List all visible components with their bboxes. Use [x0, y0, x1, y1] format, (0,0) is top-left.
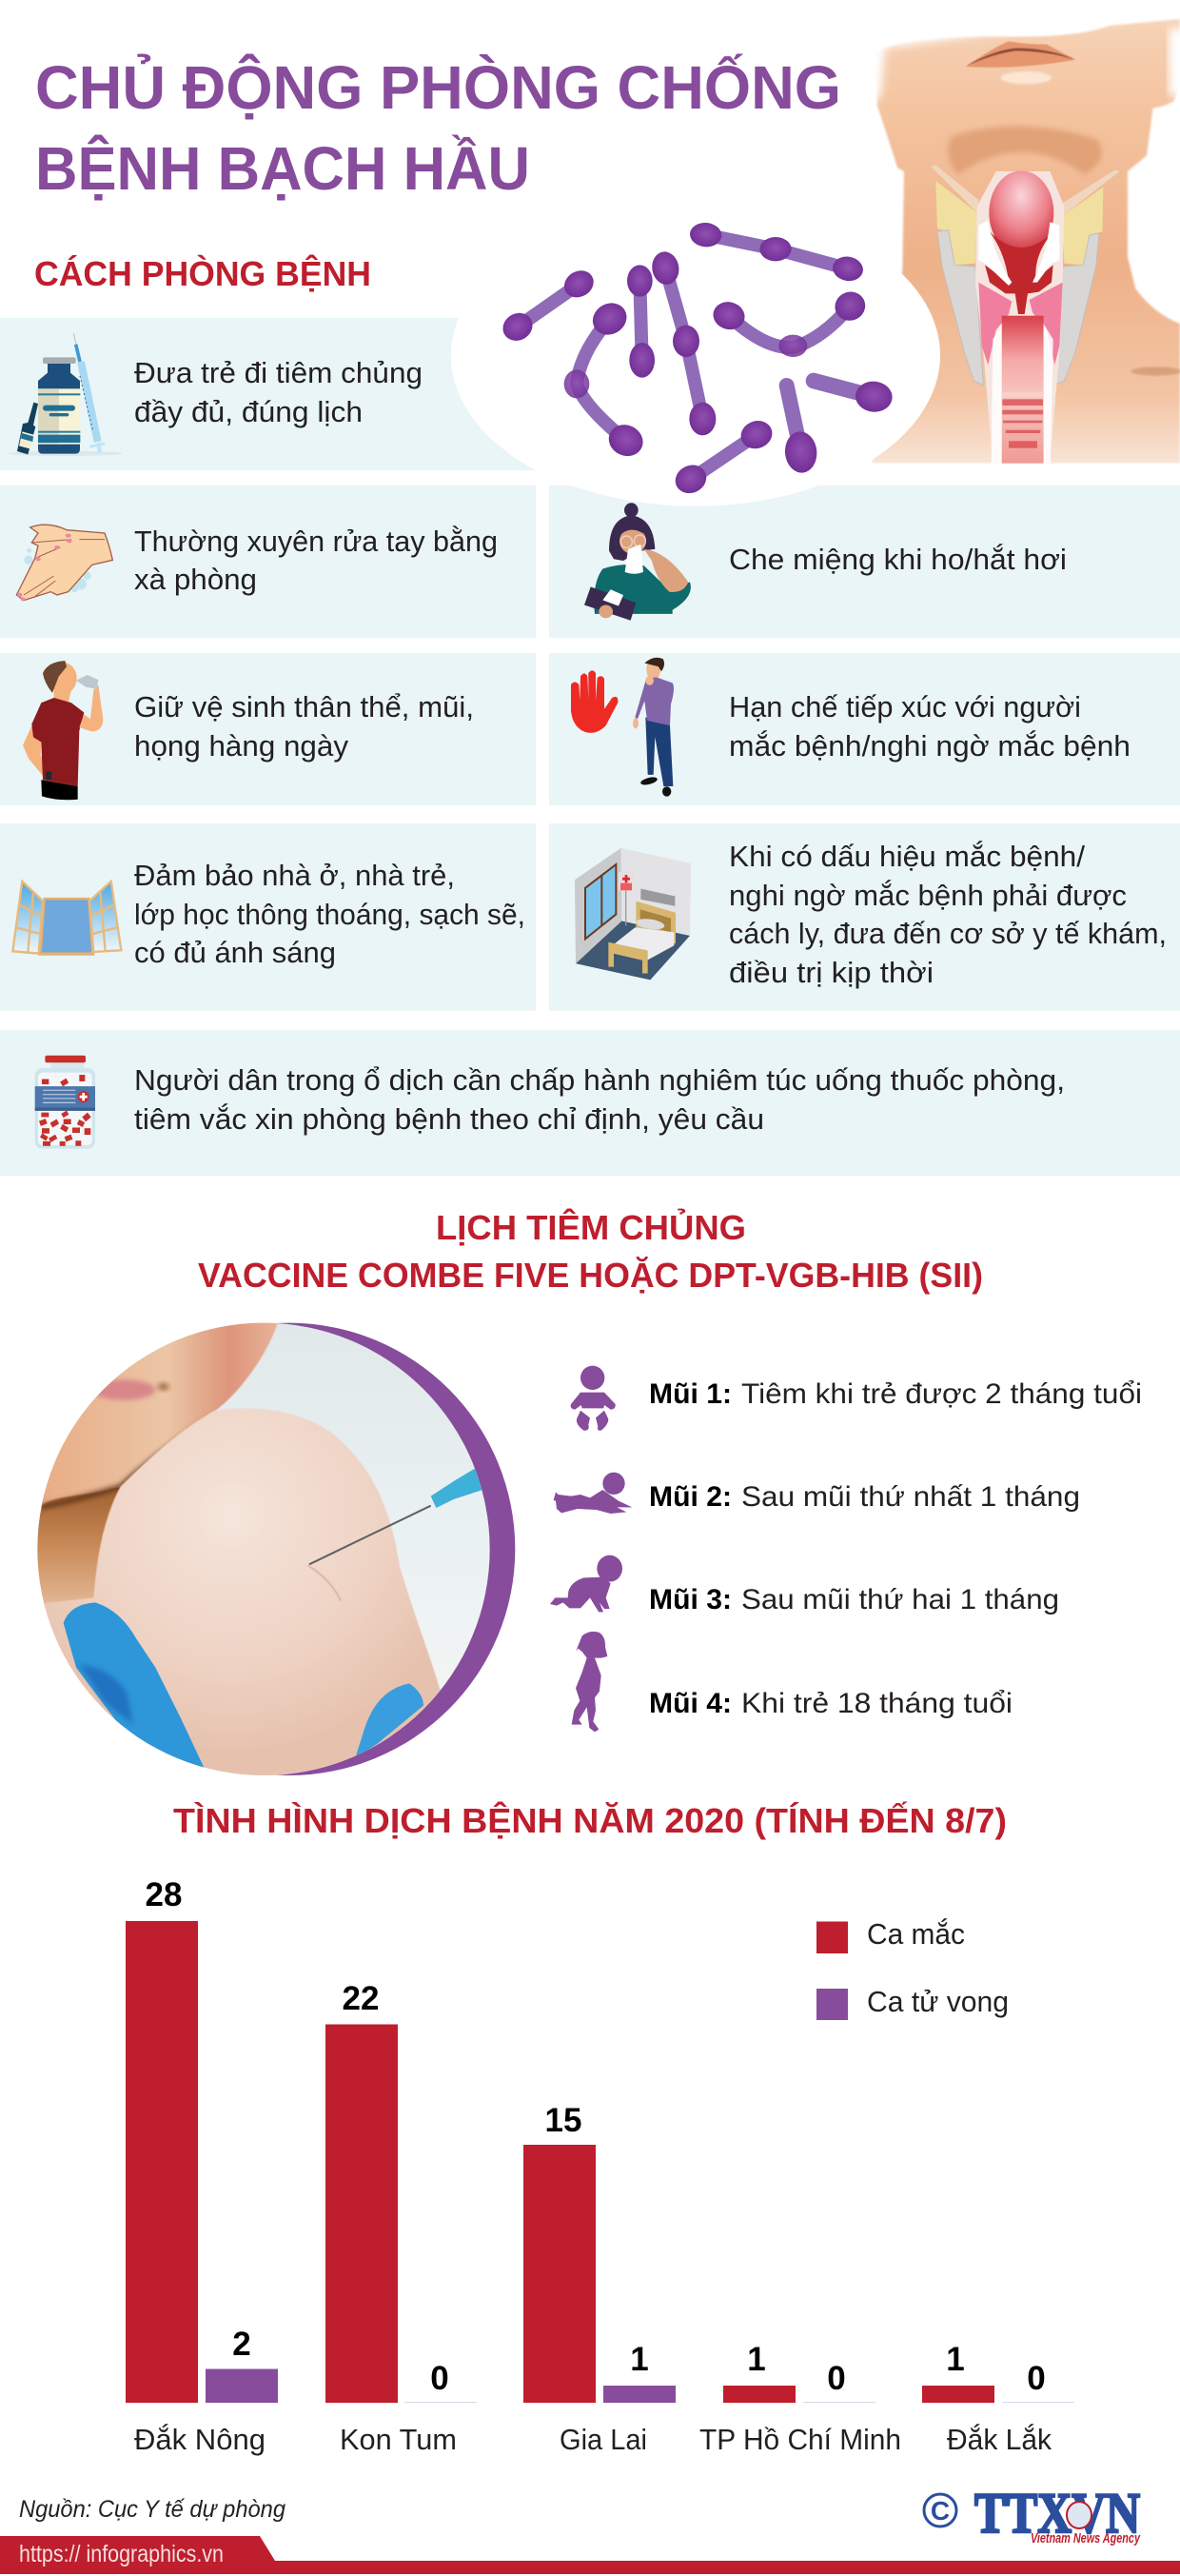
icon: toddler walking	[572, 1632, 607, 1732]
text: có đủ ánh sáng	[134, 936, 336, 969]
title: CHỦ ĐỘNG PHÒNG CHỐNG	[35, 52, 841, 122]
panel: hand washing	[0, 485, 536, 638]
group: Kon Tum: 22	[343, 1980, 379, 2017]
text: Giữ vệ sinh thân thể, mũi,	[134, 690, 474, 723]
icon: baby lying	[554, 1473, 632, 1514]
text: dose 2: Sau mũi thứ nhất 1 tháng	[741, 1481, 1080, 1513]
panel: personal hygiene	[0, 653, 536, 805]
text	[134, 1063, 1065, 1136]
logo: TTXVN: TTXVN	[974, 2482, 1140, 2545]
icon: open window	[12, 882, 121, 956]
group: TP Hồ Chí Minh	[699, 2341, 901, 2456]
group: Đắk Nông: 2	[232, 2326, 251, 2363]
text: tiêm vắc xin phòng bệnh theo chỉ định, yêu cầu	[134, 1102, 764, 1136]
heading: vaccine schedule	[198, 1207, 983, 1295]
text: mắc bệnh/nghi ngờ mắc bệnh	[729, 729, 1131, 763]
icon: hospital room	[575, 848, 691, 980]
text: dose 4: Mũi 4:	[649, 1688, 732, 1719]
panel: limit contact	[549, 653, 1180, 805]
icon: vaccine vial and syringe	[8, 333, 122, 456]
group: Kon Tum: Kon Tum	[340, 2423, 457, 2456]
text: Đảm bảo nhà ở, nhà trẻ,	[134, 859, 455, 892]
heading: vaccine schedule: LỊCH TIÊM CHỦNG	[436, 1207, 746, 1247]
legend	[816, 1917, 1009, 2020]
text: dose 1: Tiêm khi trẻ được 2 tháng tuổi	[741, 1378, 1142, 1410]
footer band with url	[0, 2536, 1180, 2574]
text: dose 2: Mũi 2:	[649, 1481, 732, 1513]
text: dose 4: Khi trẻ 18 tháng tuổi	[741, 1688, 1013, 1719]
text	[134, 690, 474, 763]
photo: child receiving injection	[29, 1318, 515, 1778]
icon: baby crawling	[550, 1556, 622, 1612]
heading: prevention: CÁCH PHÒNG BỆNH	[34, 253, 371, 293]
panel: vaccination	[0, 318, 536, 470]
text	[729, 840, 1167, 989]
text: Đưa trẻ đi tiêm chủng	[134, 356, 423, 389]
panel: isolation and treatment	[549, 823, 1180, 1011]
text: nghi ngờ mắc bệnh phải được	[729, 879, 1127, 912]
legend: Ca tử vong	[867, 1985, 1009, 2018]
group: Kon Tum	[325, 1980, 477, 2456]
text: Thường xuyên rửa tay bằng	[134, 525, 498, 558]
group: Gia Lai: Gia Lai	[560, 2423, 647, 2456]
icon: pill jar	[35, 1056, 95, 1149]
white oval behind bacteria	[872, 272, 940, 459]
group: Đắk Nông: 28	[146, 1876, 182, 1913]
text: lớp học thông thoáng, sạch sẽ,	[134, 898, 525, 931]
text: dose 3: Sau mũi thứ hai 1 tháng	[741, 1584, 1059, 1615]
group: Gia Lai	[523, 2102, 676, 2456]
text: xà phòng	[134, 563, 257, 596]
group: Đắk Nông: Đắk Nông	[134, 2423, 266, 2456]
group: Đắk Lắk: 1	[946, 2341, 965, 2378]
heading: 2020 situation: TÌNH HÌNH DỊCH BỆNH NĂM 2020 (TÍNH ĐẾN 8/7)	[173, 1800, 1007, 1840]
group: TP Hồ Chí Minh: TP Hồ Chí Minh	[699, 2423, 901, 2456]
text: Che miệng khi ho/hắt hơi	[729, 543, 1067, 576]
text: điều trị kịp thời	[729, 956, 934, 989]
icon: stop hand and man	[571, 658, 674, 797]
icon: man drinking water	[23, 661, 103, 800]
group: Đắk Lắk: 0	[1027, 2360, 1046, 2397]
title: BỆNH BẠCH HẦU	[35, 133, 530, 203]
icon: woman sneezing	[584, 503, 691, 621]
panel: ventilated housing	[0, 823, 536, 1011]
panel: cover mouth	[549, 485, 1180, 638]
group: Đắk Lắk: Đắk Lắk	[947, 2423, 1052, 2456]
text: cách ly, đưa đến cơ sở y tế khám,	[729, 917, 1167, 950]
text	[134, 859, 525, 969]
text	[134, 525, 498, 596]
heading: vaccine schedule: VACCINE COMBE FIVE HOẶC DPT-VGB-HIB (SII)	[198, 1256, 983, 1295]
icon: washing hands	[16, 525, 112, 601]
group: Kon Tum: 0	[430, 2360, 449, 2397]
bar chart	[126, 1876, 1074, 2456]
icon: infant	[571, 1366, 616, 1431]
text: Khi có dấu hiệu mắc bệnh/	[729, 840, 1085, 873]
panel: outbreak medication	[0, 1030, 1180, 1176]
text: dose 1: Mũi 1:	[649, 1378, 732, 1410]
illustration: throat anatomy	[872, 18, 1180, 464]
logo: TTXVN: Vietnam News Agency	[1031, 2530, 1140, 2546]
text: Hạn chế tiếp xúc với người	[729, 690, 1081, 723]
text	[729, 690, 1131, 763]
group: TP Hồ Chí Minh: 1	[747, 2341, 766, 2378]
group: Gia Lai: 1	[630, 2341, 649, 2378]
title	[35, 52, 841, 203]
source: Nguồn: Cục Y tế dự phòng	[19, 2496, 285, 2523]
text: họng hàng ngày	[134, 729, 349, 763]
text: dose 3: Mũi 3:	[649, 1584, 732, 1615]
footer band with url: https:// infographics.vn	[19, 2541, 224, 2567]
logo: TTXVN: C	[931, 2496, 950, 2526]
text: đầy đủ, đúng lịch	[134, 395, 363, 428]
group: Gia Lai: 15	[545, 2102, 581, 2139]
illustration: diphtheria bacteria	[498, 222, 894, 498]
group: Đắk Nông	[126, 1876, 278, 2456]
vaccine schedule list	[550, 1366, 1142, 1732]
legend: Ca mắc	[867, 1917, 965, 1951]
logo: TTXVN	[924, 2482, 1140, 2546]
group: TP Hồ Chí Minh: 0	[827, 2360, 846, 2397]
group: Đắk Lắk	[922, 2341, 1074, 2456]
text	[134, 356, 423, 428]
text: Người dân trong ổ dịch cần chấp hành nghiêm túc uống thuốc phòng,	[134, 1063, 1065, 1097]
